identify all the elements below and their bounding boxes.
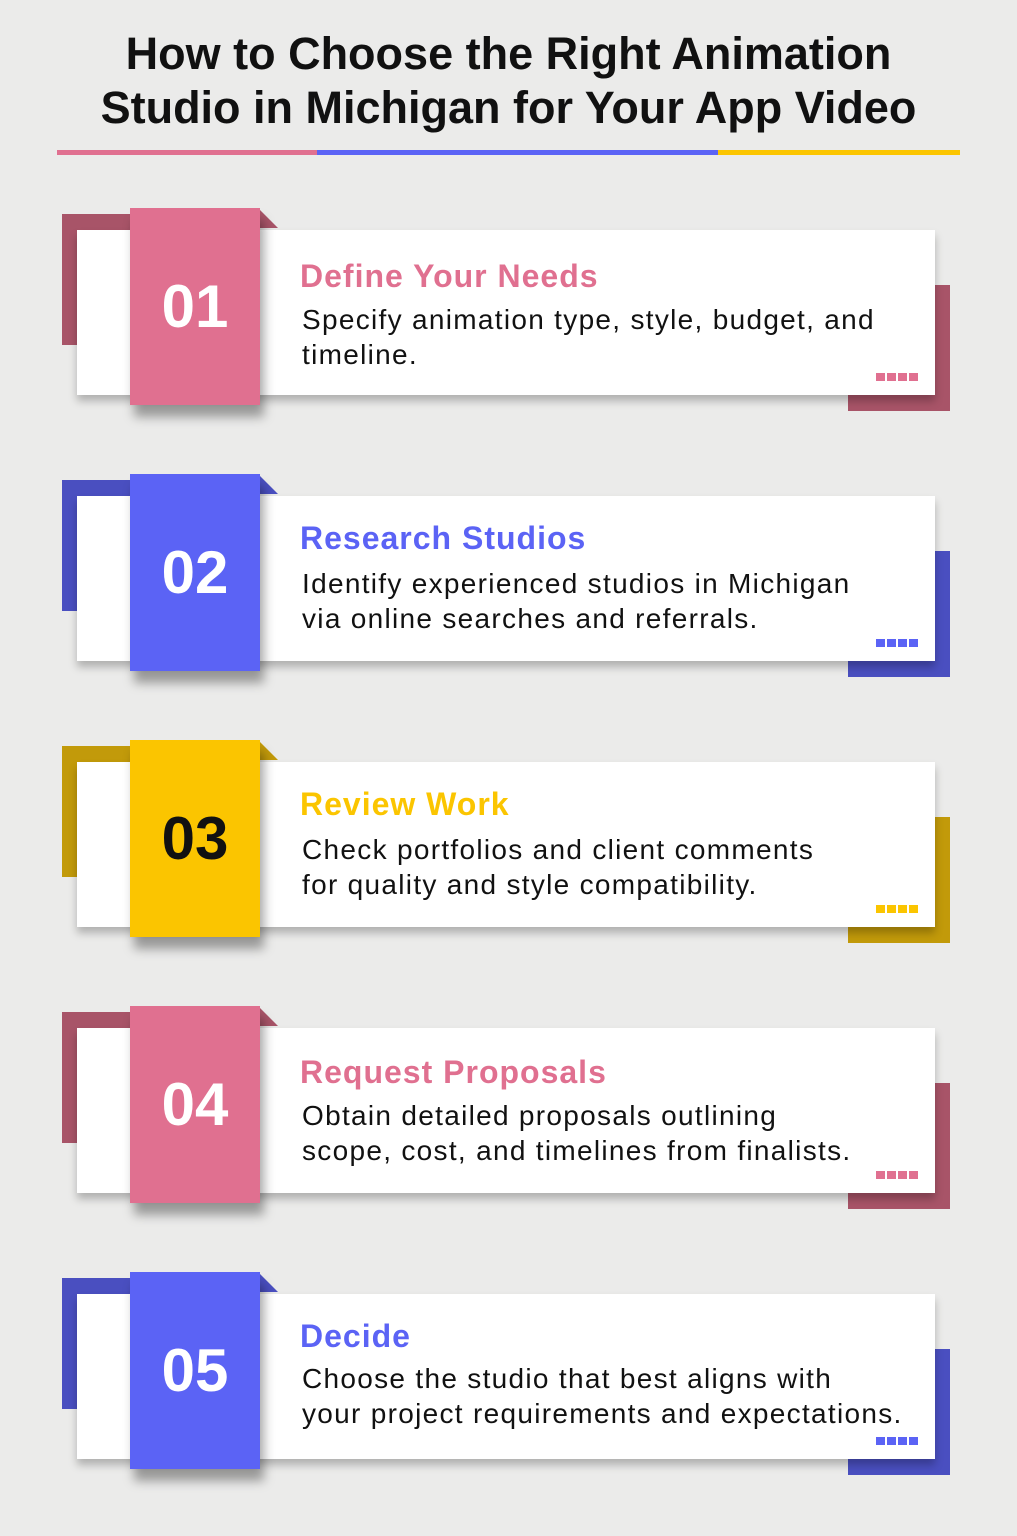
- text: Specify animation type, style, budget, and: [302, 304, 875, 335]
- text: your project requirements and expectations.: [302, 1398, 903, 1429]
- text: [302, 1363, 903, 1429]
- number 02: 02: [162, 539, 228, 606]
- number 04: 04: [162, 1071, 228, 1138]
- number 03: 03: [162, 805, 228, 872]
- dots: [876, 373, 918, 381]
- step 02: [62, 474, 950, 690]
- number 03: [130, 740, 260, 937]
- text: [302, 568, 851, 634]
- heading: Review Work: [300, 786, 510, 822]
- dots: [876, 1171, 918, 1179]
- text: [302, 834, 814, 900]
- text: via online searches and referrals.: [302, 603, 759, 634]
- text: Obtain detailed proposals outlining: [302, 1100, 777, 1131]
- text: [302, 304, 875, 370]
- step 01: [62, 208, 950, 424]
- step 04: [62, 1006, 950, 1222]
- title underline: [57, 150, 960, 155]
- text: timeline.: [302, 339, 418, 370]
- step 05: [62, 1272, 950, 1488]
- heading: Research Studios: [300, 520, 586, 556]
- number 02: [130, 474, 260, 671]
- text: scope, cost, and timelines from finalists.: [302, 1135, 851, 1166]
- number 01: 01: [162, 273, 228, 340]
- text: [302, 1100, 851, 1166]
- text: Identify experienced studios in Michigan: [302, 568, 851, 599]
- dots: [876, 905, 918, 913]
- number 01: [130, 208, 260, 405]
- text: for quality and style compatibility.: [302, 869, 758, 900]
- title: Studio in Michigan for Your App Video: [101, 82, 916, 133]
- heading: Define Your Needs: [300, 258, 599, 294]
- title: How to Choose the Right Animation: [126, 28, 891, 79]
- text: Choose the studio that best aligns with: [302, 1363, 832, 1394]
- number 05: [130, 1272, 260, 1469]
- dots: [876, 639, 918, 647]
- heading: Decide: [300, 1318, 411, 1354]
- text: Check portfolios and client comments: [302, 834, 814, 865]
- number 05: 05: [162, 1337, 228, 1404]
- title: [101, 28, 916, 133]
- step 03: [62, 740, 950, 956]
- number 04: [130, 1006, 260, 1203]
- dots: [876, 1437, 918, 1445]
- heading: Request Proposals: [300, 1054, 607, 1090]
